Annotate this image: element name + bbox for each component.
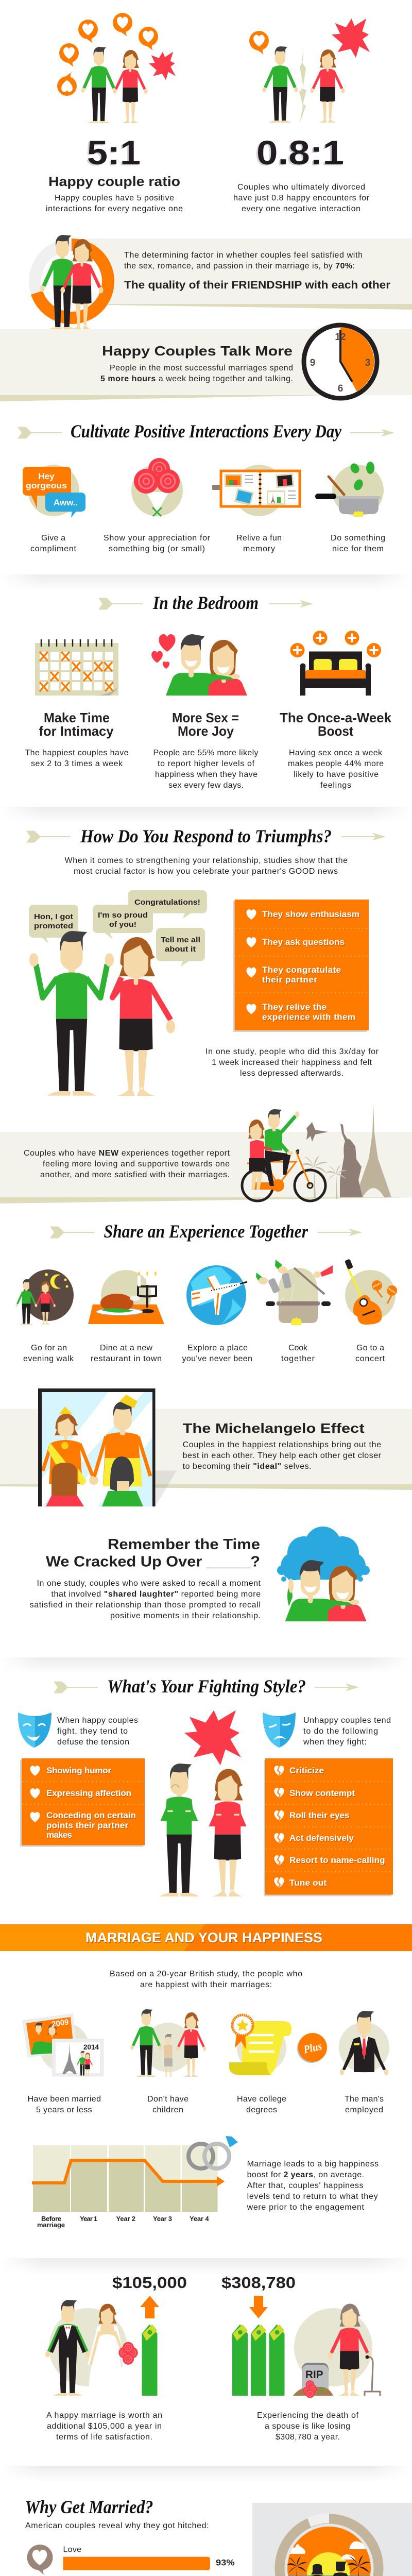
body text: best in each other. They help each other get closer: [183, 1451, 382, 1460]
caption: [331, 534, 385, 553]
body text: [25, 749, 129, 768]
body text: [233, 183, 370, 213]
icon: man with arms raised: [29, 931, 114, 1096]
icon: three stacks of money: [232, 2325, 284, 2396]
speech bubble: so proud: of you!: [109, 920, 136, 929]
icon: employed man in suit: [339, 2011, 389, 2075]
icon: speech bubbles: Hey: [38, 471, 55, 481]
section: how do you respond to triumphs: [26, 826, 386, 1096]
body text: Couples who ultimately divorced: [237, 183, 365, 192]
icon: clock with 5 hours shaded: 12: [335, 332, 346, 343]
caption: additional $105,000 a year in: [47, 2422, 162, 2431]
body text: sex every few days.: [168, 781, 244, 790]
arrow: down: [249, 2296, 268, 2318]
caption: The man's: [345, 2095, 384, 2104]
panel: think positive: [252, 2503, 412, 2576]
body text: Couples who have NEW experiences together report: [24, 1149, 230, 1158]
caption: Give a: [41, 534, 65, 543]
list: responses to good news: [233, 900, 369, 1032]
text: happy couples fight: fight, they tend to: [57, 1727, 128, 1736]
body text: Happy couples have 5 positive: [55, 194, 174, 202]
axis labels: Year 1: [80, 2215, 97, 2223]
title: Make Time: [44, 710, 110, 725]
body text: makes people 44% more: [288, 759, 384, 768]
list: unhappy fighting habits: Criticize: [289, 1766, 324, 1775]
caption: Have college: [237, 2095, 286, 2104]
speech bubble: so proud: I'm so proud: [98, 911, 148, 920]
icon: guitar and maracas: [345, 1259, 397, 1325]
caption: together: [281, 1354, 315, 1363]
body text: [46, 194, 183, 213]
icon: clock with 5 hours shaded: 6: [338, 383, 343, 394]
icon: single heart bubble: [249, 31, 269, 55]
list: happy fighting habits: [20, 1758, 145, 1847]
caption: concert: [355, 1354, 385, 1363]
section: why get married: [22, 2497, 235, 2576]
body text: [153, 749, 259, 790]
list: responses to good news: They relive the: [262, 1002, 327, 1012]
text: study result: [205, 1047, 379, 1078]
body text: [100, 364, 293, 383]
caption: [237, 2095, 286, 2114]
list: unhappy fighting habits: [264, 1758, 393, 1896]
text: determining factor: [124, 251, 363, 270]
caption: Relive a fun: [236, 534, 282, 543]
icon: smiling couple: [166, 634, 247, 696]
intro text: are happiest with their marriages:: [140, 1980, 272, 1989]
text: unhappy couples fight: Unhappy couples tend: [303, 1716, 391, 1725]
body text: every one negative interaction: [242, 205, 360, 213]
title: More Sex =: [172, 710, 239, 725]
icon: speech bubbles: Aww..: [54, 498, 78, 507]
heading: We Cracked Up Over _____?: [46, 1554, 260, 1570]
caption: [28, 2095, 101, 2114]
heading with arrows: [98, 592, 313, 613]
speech bubble: tell me all: about it: [165, 945, 196, 954]
text: unhappy couples fight: [303, 1716, 391, 1747]
section: death of a spouse: [221, 2274, 380, 2442]
body text: to becoming their "ideal" selves.: [183, 1462, 312, 1471]
caption: Go to a: [356, 1344, 384, 1352]
caption: [46, 2411, 162, 2442]
icon: evening walk: [15, 1269, 74, 1325]
body text: [183, 1440, 382, 1471]
caption: Don't have: [147, 2095, 188, 2104]
speech bubble: promoted: [29, 905, 78, 943]
caption: [281, 1344, 315, 1363]
heading with arrows: Share an Experience Together: [104, 1221, 308, 1242]
text: unhappy couples fight: when they fight:: [303, 1738, 367, 1747]
caption: [147, 2095, 188, 2114]
caption: Have been married: [28, 2095, 101, 2104]
icon: restaurant dinner: [88, 1270, 164, 1324]
heading with arrows: How Do You Respond to Triumphs?: [80, 826, 332, 846]
list: responses to good news: They ask questions: [262, 937, 345, 947]
caption: degrees: [246, 2106, 277, 2114]
icon: couple without children: [130, 2009, 206, 2077]
text: happy couples fight: [57, 1716, 138, 1747]
section: in the bedroom: [25, 592, 392, 790]
body text: that involved "shared laughter" reported being more: [52, 1590, 261, 1599]
icon: airplane over globe: [186, 1265, 247, 1325]
title: [39, 710, 114, 739]
icon: thought cloud: [277, 1527, 370, 1582]
body text: happiness when they have: [155, 770, 258, 779]
callout: friendship: The quality of their FRIENDSHIP with each other: [124, 279, 390, 291]
icon: wedding rings and diamond: [188, 2136, 238, 2168]
caption: [104, 534, 211, 553]
axis labels: Before: [41, 2215, 61, 2223]
caption: employed: [345, 2106, 383, 2114]
list: unhappy fighting habits: Tune out: [289, 1878, 327, 1888]
icon: large red burst: [332, 19, 370, 58]
caption: Do something: [331, 534, 385, 543]
icon: cooking together: [256, 1260, 333, 1325]
icon: photos 2009 and 2014: [22, 2013, 104, 2076]
icon: college diploma: [229, 2015, 291, 2075]
caption: children: [152, 2106, 183, 2114]
icon: plus badge: Plus: [302, 2040, 323, 2056]
intro text: most crucial factor is how you celebrate your partner's GOOD news: [74, 867, 338, 876]
panel: new experiences: [0, 1105, 412, 1204]
caption: [91, 1344, 162, 1363]
axis labels: Year 3: [153, 2215, 172, 2223]
title: for Intimacy: [39, 723, 114, 739]
body text: to report higher levels of: [158, 759, 255, 768]
body text: In one study, couples who were asked to recall a moment: [37, 1579, 261, 1588]
icon: mirror with idealised couple: [38, 1388, 177, 1506]
caption: [23, 1344, 74, 1363]
axis labels: [37, 2215, 209, 2229]
text: happy couples fight: When happy couples: [57, 1716, 138, 1725]
caption: terms of life satisfaction.: [56, 2433, 152, 2442]
icon: world landmarks: [301, 1105, 391, 1199]
body text: People in the most successful marriages spend: [110, 364, 293, 372]
caption: [355, 1344, 385, 1363]
body text: feelings: [320, 781, 351, 790]
figure: $308,780: $308,780: [221, 2274, 296, 2292]
icon: clock with 5 hours shaded: 3: [365, 358, 370, 368]
text: happy couples fight: defuse the tension: [57, 1738, 129, 1747]
body text: another, and more satisfied with their marriages.: [40, 1171, 230, 1179]
body text: interactions for every negative one: [46, 205, 183, 213]
icon: widow at grave: [293, 2304, 380, 2398]
text: happiness boost: boost for 2 years, on average.: [247, 2171, 364, 2179]
body text: [24, 1149, 230, 1179]
bar: love: Love: [63, 2546, 81, 2554]
caption: Show your appreciation for: [104, 534, 211, 543]
body text: The happiest couples have: [25, 749, 129, 757]
panel: happy couples talk more: [0, 325, 412, 401]
subheading: American couples reveal why they got hitched:: [25, 2521, 209, 2530]
caption: [30, 534, 77, 553]
chart: 70 percent ring: [35, 245, 108, 318]
bar: love: 93%: [216, 2558, 235, 2568]
icon: widow at grave: RIP: [305, 2369, 323, 2381]
icon: cooking pot: [315, 462, 384, 517]
section: cultivate positive interactions: [18, 421, 394, 553]
chart: happiness over marriage years: [32, 2136, 379, 2229]
icon: calendar with crosses: [35, 639, 118, 696]
text: happiness boost: were prior to the engagement: [247, 2203, 365, 2212]
body text: People are 55% more likely: [153, 749, 259, 757]
icon: separated couple: [263, 46, 345, 123]
panel: the michelangelo effect: [0, 1388, 412, 1506]
caption: restaurant in town: [91, 1354, 162, 1363]
heading: Happy Couples Talk More: [102, 343, 293, 359]
speech bubble: tell me all: Tell me all: [161, 936, 200, 944]
icon: hearts: [151, 634, 176, 669]
caption: [345, 2095, 384, 2114]
icon: happy mask: [18, 1713, 52, 1748]
icon: speech bubbles: gorgeous: [26, 481, 67, 490]
arrow: up: [140, 2296, 159, 2318]
text: happiness boost: [247, 2160, 379, 2212]
banner: marriage and your happiness: [0, 1924, 412, 1951]
icon: bed with plus signs: [290, 631, 381, 696]
intro text: Based on a 20-year British study, the people who: [110, 1970, 302, 1978]
icon: happy couple holding hands: [81, 47, 147, 123]
heading: [46, 1536, 260, 1570]
body text: feeling more loving and supportive towards one: [43, 1160, 230, 1168]
caption: [257, 2411, 359, 2442]
speech bubble: so proud: [93, 905, 153, 939]
heading with arrows: Cultivate Positive Interactions Every Day: [71, 421, 342, 442]
title: [172, 710, 239, 739]
panel: friendship factor: [35, 235, 412, 330]
icon: stack of money: [142, 2325, 158, 2396]
title: The Once-a-Week: [280, 710, 392, 725]
axis labels: marriage: [37, 2221, 65, 2229]
body text: [288, 749, 384, 790]
caption: Dine at a new: [100, 1344, 152, 1352]
icon: photos 2009 and 2014: 2009: [51, 2018, 70, 2029]
body text: likely to have positive: [294, 770, 379, 779]
bar: love: [27, 2545, 235, 2575]
speech bubble: congratulations: [128, 890, 207, 919]
speech bubble: congratulations: Congratulations!: [134, 898, 200, 907]
ratio 5:1: 5:1: [87, 133, 141, 172]
text: happiness boost: After that, couples' happiness: [247, 2181, 364, 2190]
caption: compliment: [30, 545, 77, 553]
heading with arrows: In the Bedroom: [152, 592, 259, 613]
caption: Explore a place: [187, 1344, 248, 1352]
body text: [30, 1579, 261, 1620]
caption: $308,780 a year.: [276, 2433, 340, 2442]
icon: plus badge: [297, 2033, 327, 2063]
icon: crack between couple: [299, 46, 306, 123]
list: happy fighting habits: points their partner: [46, 1821, 128, 1830]
heading: Remember the Time: [108, 1536, 260, 1553]
caption: Go for an: [31, 1344, 67, 1352]
text: study result: 1 week increased their happiness and felt: [212, 1058, 372, 1067]
text: study result: In one study, people who did this 3x/day for: [205, 1047, 379, 1056]
intro text: [65, 856, 348, 876]
speech bubble: promoted: promoted: [34, 922, 73, 930]
text: determining factor: the sex, romance, and passion in their marriage is, by 70%:: [124, 262, 355, 270]
list: unhappy fighting habits: Resort to name-calling: [289, 1855, 385, 1865]
intro text: [110, 1970, 302, 1989]
panel: happy couple ratio: [46, 13, 183, 213]
caption: [236, 534, 282, 553]
panel: shared laughter: [30, 1527, 370, 1621]
title: [280, 710, 392, 739]
icon: photo album: [212, 465, 300, 516]
caption: you've never been: [182, 1354, 252, 1363]
body text: satisfied in their relationship than those prompted to recall: [30, 1601, 261, 1609]
icon: bride and groom: [45, 2300, 138, 2396]
caption: evening walk: [23, 1354, 74, 1363]
icon: clock with 5 hours shaded: [304, 325, 377, 398]
icon: couple embracing: [40, 235, 104, 330]
section: share an experience together: [15, 1221, 397, 1363]
icon: clock with 5 hours shaded: 9: [310, 358, 315, 368]
caption: Experiencing the death of: [257, 2411, 359, 2420]
heading: Why Get Married?: [25, 2497, 153, 2517]
text: study result: less depressed afterwards.: [240, 1069, 344, 1078]
icon: sunset badge: [280, 2518, 379, 2576]
caption: 5 years or less: [36, 2106, 92, 2114]
icon: woman with hand at chin: [112, 937, 175, 1096]
caption: something big (or small): [109, 545, 205, 553]
body text: sex 2 to 3 times a week: [31, 759, 123, 768]
section: british study: [22, 1970, 389, 2114]
body text: Having sex once a week: [289, 749, 383, 757]
section: happy marriage value: [45, 2274, 187, 2442]
icon: roses bouquet: [131, 458, 183, 516]
body text: positive moments in their relationship.: [110, 1612, 261, 1620]
caption: nice for them: [332, 545, 384, 553]
caption: Cook: [288, 1344, 308, 1352]
icon: speech bubbles: [23, 465, 85, 518]
caption: [182, 1344, 252, 1363]
intro text: When it comes to strengthening your relationship, studies show that the: [65, 856, 348, 865]
list: responses to good news: experience with them: [262, 1012, 355, 1022]
ratio 0.8:1: 0.8:1: [256, 133, 344, 172]
list: happy fighting habits: makes: [46, 1830, 72, 1840]
list: unhappy fighting habits: Roll their eyes: [289, 1810, 349, 1820]
text: happiness boost: levels tend to return to what they: [247, 2192, 378, 2201]
text: determining factor: The determining factor in whether couples feel satisfied with: [124, 251, 363, 260]
speech bubble: tell me all: [156, 928, 205, 967]
caption: memory: [243, 545, 275, 553]
panel: divorcing couple ratio: [233, 19, 370, 213]
icon: sad mask: [263, 1713, 296, 1748]
figure: $105,000: $105,000: [112, 2274, 187, 2292]
list: responses to good news: They show enthusiasm: [262, 909, 359, 919]
icon: photos 2009 and 2014: 2014: [83, 2043, 99, 2051]
title: More Joy: [178, 723, 234, 739]
heading with arrows: What's Your Fighting Style?: [107, 1676, 306, 1697]
text: unhappy couples fight: to do the following: [303, 1727, 378, 1736]
body text: have just 0.8 happy encounters for: [233, 194, 370, 202]
heading: Happy couple ratio: [48, 174, 180, 189]
text: happiness boost: Marriage leads to a big happiness: [247, 2160, 379, 2168]
list: unhappy fighting habits: Act defensively: [289, 1833, 354, 1843]
list: responses to good news: their partner: [262, 975, 317, 985]
list: responses to good news: They congratulate: [262, 965, 341, 975]
icon: red burst: [184, 1710, 241, 1765]
list: unhappy fighting habits: Show contempt: [289, 1788, 355, 1798]
icon: couple on bicycle: [242, 1109, 325, 1201]
caption: A happy marriage is worth an: [46, 2411, 162, 2420]
list: happy fighting habits: Showing humor: [46, 1766, 111, 1775]
heading: The Michelangelo Effect: [183, 1420, 365, 1436]
speech bubble: promoted: Hon, I got: [34, 912, 73, 921]
icon: five heart speech bubbles: [57, 13, 158, 96]
title: Boost: [318, 723, 353, 739]
list: happy fighting habits: Expressing affection: [46, 1788, 131, 1798]
caption: a spouse is like losing: [265, 2422, 350, 2431]
section: what's your fighting style: [18, 1676, 393, 1896]
list: happy fighting habits: Conceding on certain: [46, 1810, 136, 1820]
icon: couple with arms crossed: [160, 1764, 247, 1896]
body text: Couples in the happiest relationships bring out the: [183, 1440, 381, 1449]
body text: 5 more hours a week being together and talking.: [100, 375, 293, 383]
axis labels: Year 4: [190, 2215, 209, 2223]
axis labels: Year 2: [116, 2215, 135, 2223]
icon: laughing couple: [285, 1560, 367, 1621]
icon: red burst: [149, 52, 176, 80]
banner: marriage and your happiness: MARRIAGE AND YOUR HAPPINESS: [85, 1930, 322, 1945]
